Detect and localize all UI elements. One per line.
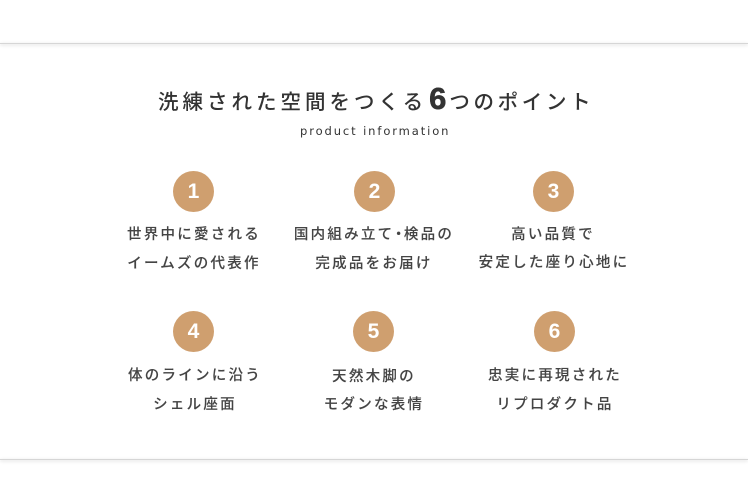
bottom divider band — [0, 459, 748, 460]
number badge 5: 5 — [368, 320, 379, 343]
number badge 4 — [173, 311, 214, 352]
number badge 4: 4 — [188, 320, 199, 343]
point 2 text line 2: 完成品をお届け — [315, 256, 433, 272]
point 6 text: 忠実に再現された — [488, 368, 622, 384]
number badge 3 — [533, 171, 574, 212]
point 3 text: 高い品質で — [511, 227, 595, 243]
point 2 text: 国内組み立て・検品の — [294, 227, 454, 243]
number badge 1: 1 — [188, 180, 199, 203]
point 1 text line 2: イームズの代表作 — [127, 256, 261, 272]
number badge 6: 6 — [549, 320, 560, 343]
point 4 text: 体のラインに沿う — [128, 368, 262, 384]
point 6 text line 2: リプロダクト品 — [496, 397, 614, 413]
number badge 6 — [534, 311, 575, 352]
top divider band — [0, 43, 748, 44]
number badge 3: 3 — [548, 180, 559, 203]
number badge 2 — [354, 171, 395, 212]
point 1 text: 世界中に愛される — [127, 227, 261, 243]
subtitle: product information — [300, 124, 450, 138]
title: 洗練された空間をつくる6つのポイント — [158, 81, 594, 116]
number badge 2: 2 — [369, 180, 380, 203]
point 4 text line 2: シェル座面 — [153, 397, 237, 413]
number badge 1 — [173, 171, 214, 212]
point 5 text line 2: モダンな表情 — [324, 397, 424, 413]
point 3 text line 2: 安定した座り心地に — [479, 255, 629, 271]
point 5 text: 天然木脚の — [332, 369, 416, 385]
number badge 5 — [353, 311, 394, 352]
